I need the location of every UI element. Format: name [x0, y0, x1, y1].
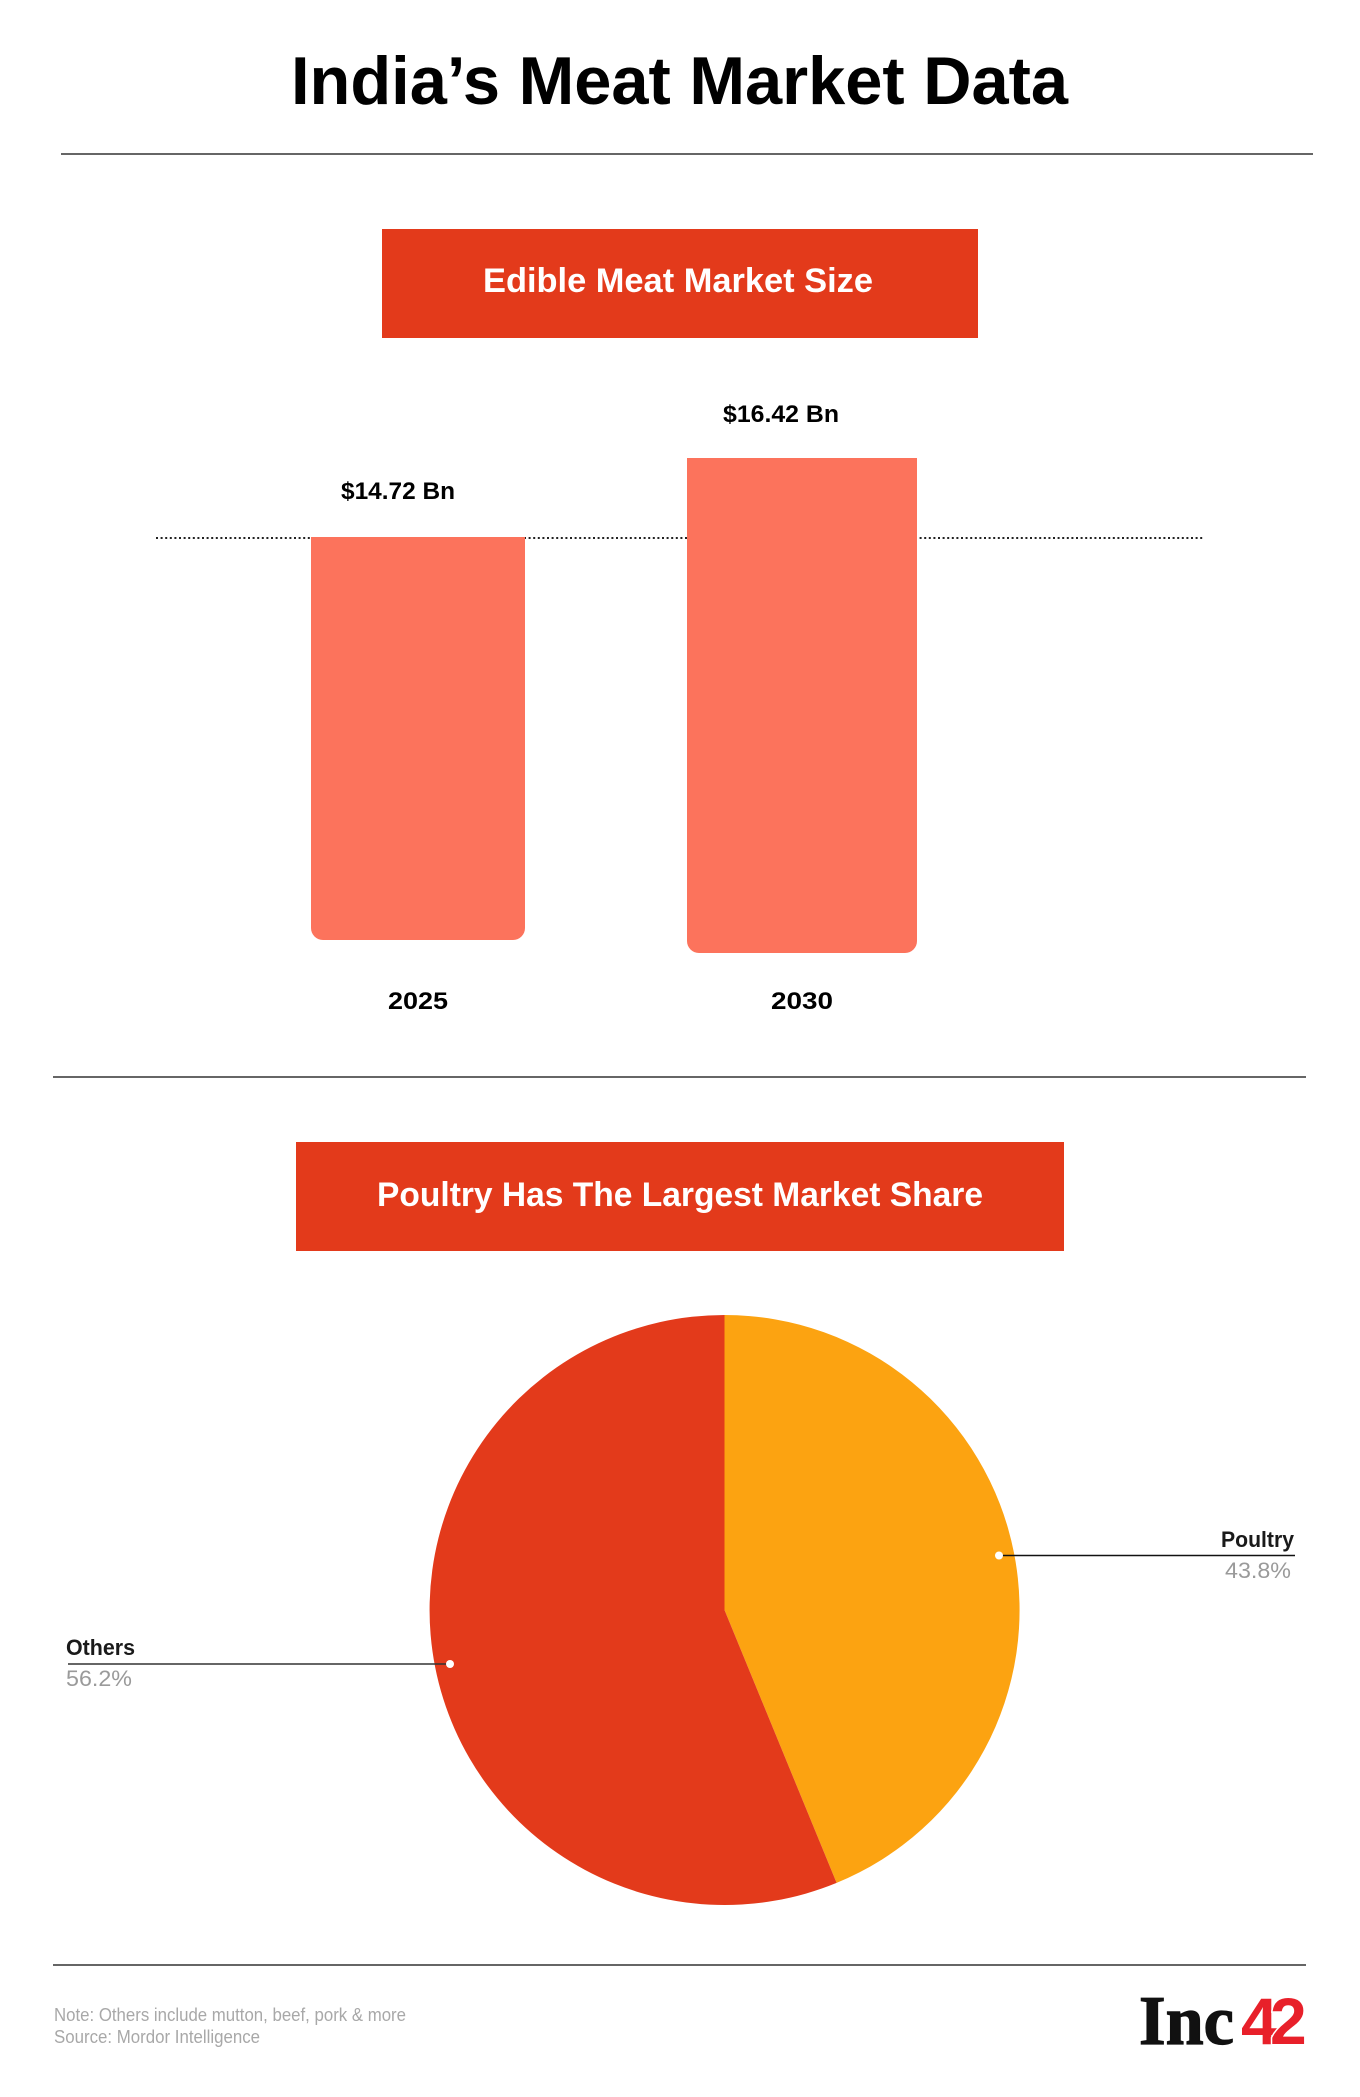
heading: poultry market share — [296, 1142, 1064, 1251]
source note: Note: Others include mutton, beef, pork & more — [54, 2005, 406, 2025]
logo: Inc42: 4 — [1241, 1984, 1278, 2058]
bar: 2025: 2025 — [388, 988, 448, 1015]
logo: Inc42 — [1139, 1983, 1307, 2060]
callout: poultry: Poultry — [1221, 1527, 1295, 1552]
logo: Inc42: Inc — [1139, 1983, 1234, 2060]
source note — [54, 2005, 406, 2047]
callout: others: 56.2% — [66, 1666, 132, 1691]
bar: 2030 — [687, 401, 917, 1015]
bar chart — [311, 401, 917, 1015]
bar: 2030: $16.42 Bn — [723, 401, 839, 428]
heading: poultry market share: Poultry Has The Largest Market Share — [377, 1176, 983, 1214]
bar: 2025 — [311, 478, 525, 1015]
logo: Inc42: 2 — [1270, 1984, 1307, 2058]
source note: Source: Mordor Intelligence — [54, 2027, 260, 2047]
callout: poultry: 43.8% — [1225, 1558, 1291, 1583]
panel: edible meat market size — [156, 229, 1204, 1015]
bar: 2030: 2030 — [771, 988, 833, 1015]
pie chart — [430, 1315, 1020, 1905]
callout: poultry — [995, 1527, 1295, 1583]
title: India’s Meat Market Data — [291, 43, 1069, 119]
heading: edible meat market size — [382, 229, 978, 338]
callout: others: Others — [66, 1635, 135, 1660]
panel: poultry market share — [66, 1142, 1295, 1905]
bar: 2025: $14.72 Bn — [341, 478, 455, 505]
heading: edible meat market size: Edible Meat Market Size — [483, 262, 873, 300]
callout: others — [66, 1635, 454, 1691]
